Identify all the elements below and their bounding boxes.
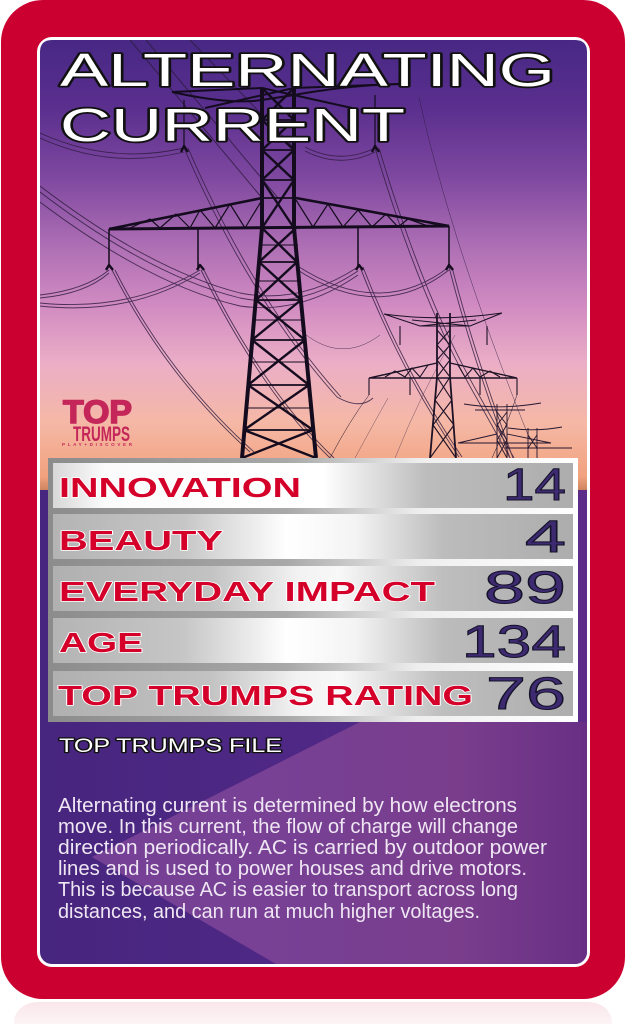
distant pylons [458, 403, 572, 458]
stat labels: EVERYDAY IMPACT [59, 576, 435, 607]
panel frame [48, 458, 578, 722]
description text: This is because AC is easier to transport across long [58, 879, 518, 901]
stat values: 4 [525, 511, 566, 562]
description text: Alternating current is determined by how electrons [58, 795, 517, 817]
overhead wires [40, 40, 530, 458]
description text: move. In this current, the flow of charge will change [58, 816, 518, 838]
stat values [462, 459, 566, 719]
title: CURRENT [60, 99, 405, 151]
description text: lines and is used to power houses and drive motors. [58, 858, 527, 880]
lower purple panel [40, 470, 587, 964]
stat values: 76 [486, 668, 566, 719]
second pylon [330, 313, 517, 458]
stat labels: BEAUTY [59, 525, 223, 556]
stat labels: TOP TRUMPS RATING [58, 680, 473, 711]
stats panel [48, 458, 578, 722]
main pylon [106, 84, 453, 458]
top trumps logo [62, 394, 133, 447]
power line photo [40, 40, 587, 490]
title: ALTERNATING [60, 44, 555, 96]
stat labels: INNOVATION [59, 472, 301, 503]
card reflection [14, 1002, 612, 1024]
description text: direction periodically. AC is carried by outdoor power [58, 837, 547, 859]
title [60, 44, 555, 151]
row backgrounds [53, 463, 573, 508]
sky gradient [40, 40, 587, 490]
description text: distances, and can run at much higher voltages. [58, 901, 480, 923]
stat labels: AGE [59, 627, 143, 658]
description text [58, 795, 547, 923]
stat values: 89 [484, 562, 566, 613]
file heading: TOP TRUMPS FILE [59, 736, 282, 757]
top trumps logo: TRUMPS [73, 423, 130, 446]
stat values: 134 [462, 616, 566, 667]
stat values: 14 [503, 459, 566, 510]
top trumps logo: TOP [63, 394, 132, 430]
top trumps logo: PLAY+DISCOVER [62, 442, 133, 447]
stat labels [58, 472, 473, 711]
